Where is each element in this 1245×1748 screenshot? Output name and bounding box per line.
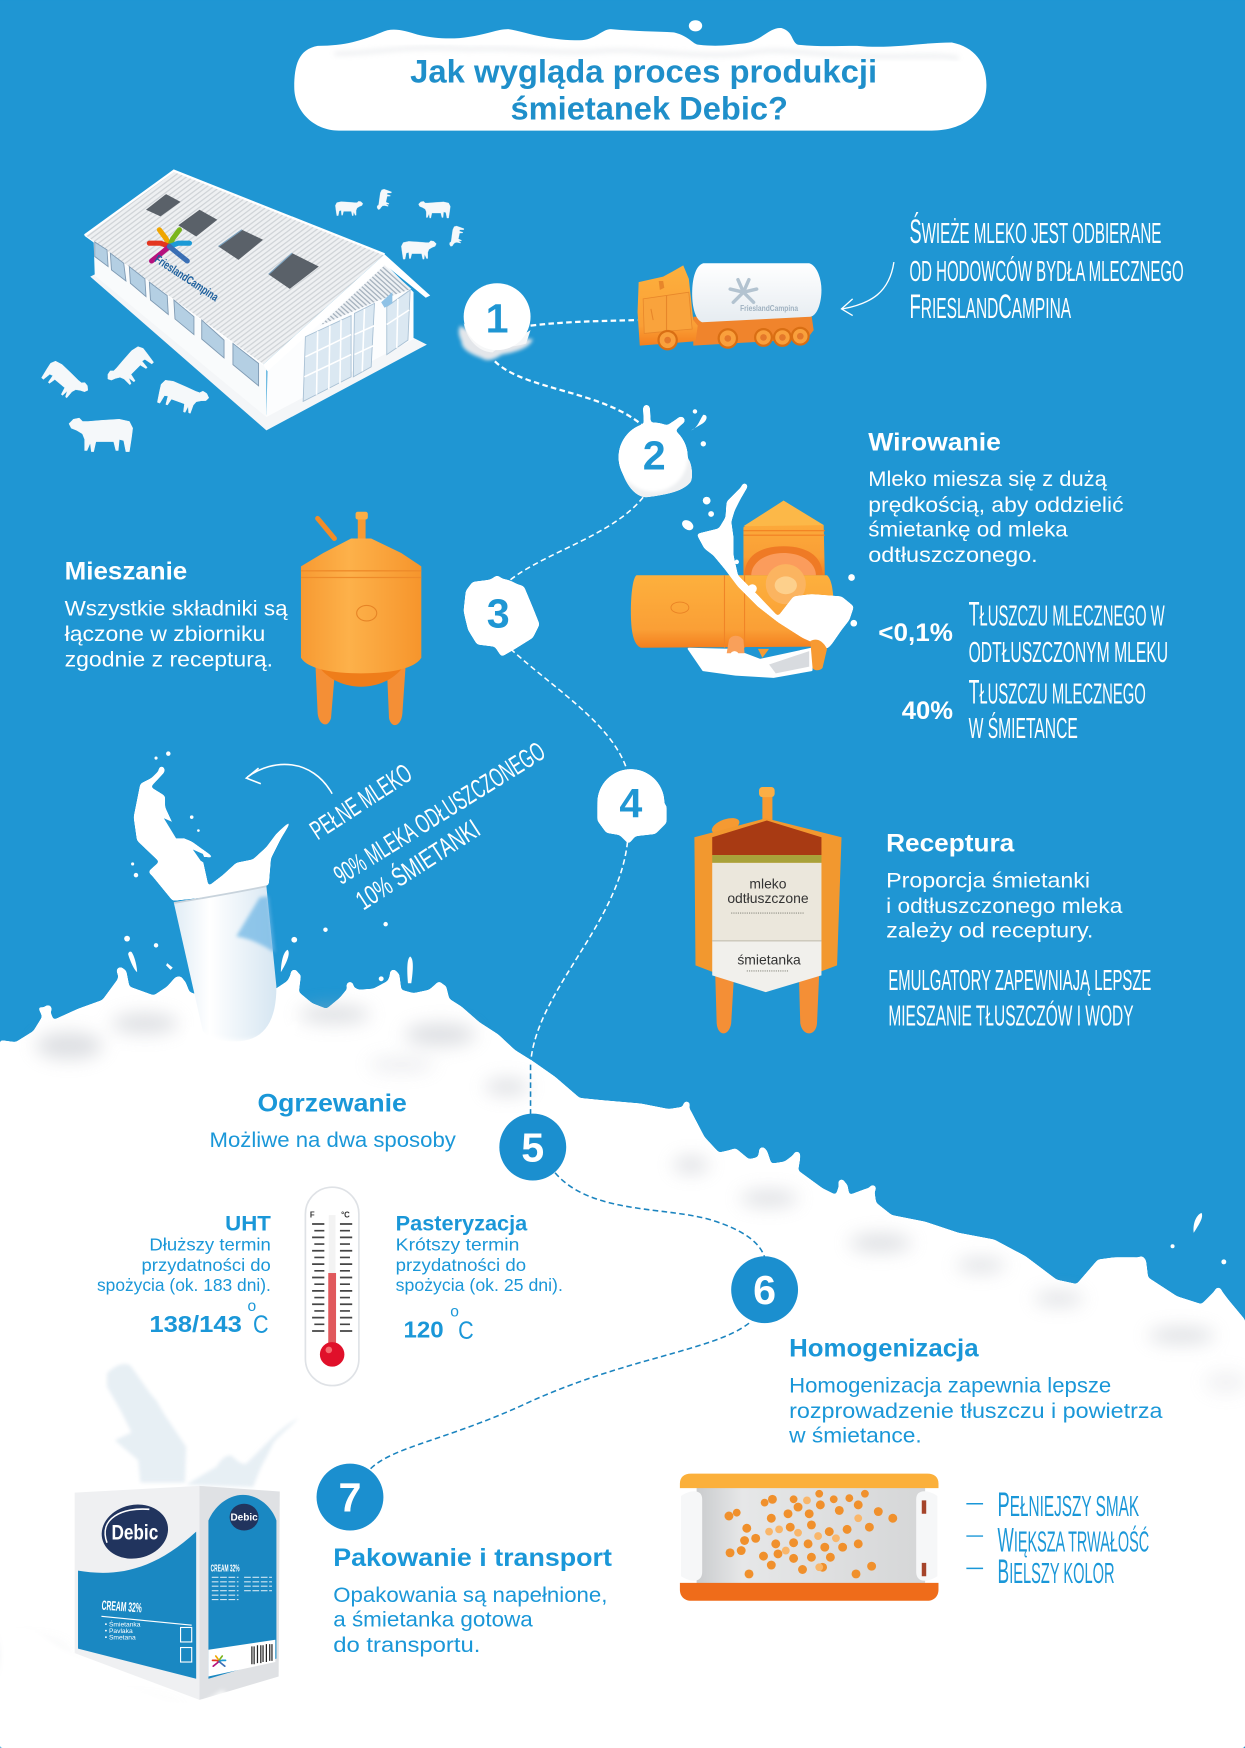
base platform bbox=[90, 274, 427, 430]
step 6 badge bbox=[731, 1256, 798, 1323]
Receptura text: Proporcja śmietanki bbox=[886, 869, 1090, 892]
Debic product box: CREAM 32% bbox=[101, 1598, 142, 1615]
truck cab bbox=[638, 265, 698, 346]
Wirowanie text: prędkością, aby oddzielić bbox=[868, 494, 1124, 517]
Homogenizacja text: Homogenizacja zapewnia lepsze bbox=[789, 1374, 1111, 1397]
step 3 badge bbox=[464, 575, 539, 657]
gable edge bbox=[263, 254, 430, 371]
step 2 badge bbox=[619, 405, 710, 504]
gable wall bbox=[266, 263, 414, 417]
fat stats: 40% bbox=[902, 698, 953, 725]
UHT column: 138/143 bbox=[149, 1311, 242, 1337]
centrifuge illustration bbox=[631, 483, 857, 677]
step 7 badge bbox=[317, 1464, 383, 1530]
droplets bbox=[124, 922, 1226, 1264]
truck illustration: FrieslandCampina bbox=[740, 304, 799, 313]
step 3 badge: 3 bbox=[487, 591, 510, 637]
thermometer bbox=[305, 1187, 359, 1386]
UHT column: przydatności do bbox=[142, 1255, 271, 1275]
Wirowanie text: Mleko miesza się z dużą bbox=[868, 468, 1107, 491]
horizontal cylinder bbox=[631, 575, 834, 648]
text: fresh milk: FRIESLANDCAMPINA bbox=[910, 288, 1071, 326]
chassis bbox=[693, 314, 814, 346]
Mieszanie text: łączone w zbiorniku bbox=[65, 623, 265, 646]
Wirowanie text: odtłuszczonego. bbox=[868, 544, 1038, 567]
Pakowanie text bbox=[333, 1545, 612, 1657]
step 1 badge: 1 bbox=[486, 295, 509, 341]
legs bbox=[727, 636, 745, 653]
Debic product box: • Pavlaka bbox=[105, 1628, 133, 1635]
Homogenizacja text: Homogenizacja bbox=[789, 1336, 979, 1363]
benefits list: BIELSZY KOLOR bbox=[998, 1553, 1115, 1591]
skylights bbox=[146, 194, 319, 289]
Homogenizacja text: rozprowadzenie tłuszczu i powietrza bbox=[789, 1400, 1163, 1423]
glass entrance bbox=[303, 290, 410, 401]
thermometer: °C bbox=[341, 1210, 350, 1219]
recipe tank illustration bbox=[694, 787, 842, 1033]
milk foreground bbox=[0, 1625, 334, 1748]
recipe tank illustration: śmietanka bbox=[737, 951, 801, 967]
Pasteryzacja column: o bbox=[450, 1303, 459, 1320]
Pakowanie text: do transportu. bbox=[333, 1634, 480, 1657]
Pasteryzacja column: C bbox=[458, 1318, 474, 1345]
faded splash bbox=[107, 1364, 299, 1487]
recipe tank illustration: odtłuszczone bbox=[727, 890, 809, 906]
recipe tank illustration: mleko bbox=[749, 875, 787, 891]
Mieszanie text bbox=[65, 559, 288, 672]
Debic product box: Debic bbox=[111, 1521, 158, 1544]
glass bbox=[174, 886, 276, 1041]
Wirowanie text: śmietankę od mleka bbox=[868, 518, 1068, 541]
Pasteryzacja column: Krótszy termin bbox=[396, 1235, 519, 1255]
step 4 badge: 4 bbox=[619, 780, 642, 826]
Debic product box: Debic bbox=[230, 1512, 258, 1523]
mixing tank illustration bbox=[301, 512, 421, 725]
thermometer: F bbox=[310, 1210, 315, 1219]
Receptura text: zależy od receptury. bbox=[886, 920, 1093, 943]
Pakowanie text: Opakowania są napełnione, bbox=[333, 1584, 607, 1607]
title: śmietanek Debic? bbox=[510, 90, 788, 126]
UHT column: spożycia (ok. 183 dni). bbox=[97, 1275, 271, 1295]
title: Jak wygląda proces produkcji bbox=[410, 54, 877, 90]
Ogrzewanie text: Ogrzewanie bbox=[257, 1090, 407, 1117]
Mieszanie text: Mieszanie bbox=[65, 559, 187, 586]
Pasteryzacja column: Pasteryzacja bbox=[396, 1213, 527, 1236]
Homogenizacja text: w śmietance. bbox=[788, 1424, 922, 1447]
Ogrzewanie text bbox=[210, 1090, 456, 1152]
step 1 badge bbox=[459, 283, 533, 360]
glass of milk with splash bbox=[131, 751, 297, 1063]
logo bbox=[149, 230, 189, 261]
UHT column: C bbox=[253, 1312, 269, 1339]
UHT column bbox=[97, 1213, 271, 1339]
Pakowanie text: a śmietanka gotowa bbox=[333, 1608, 533, 1631]
Wirowanie text bbox=[868, 429, 1124, 567]
Debic product box: • Smetana bbox=[105, 1635, 136, 1642]
fat globules bbox=[724, 1490, 897, 1578]
Pakowanie text: Pakowanie i transport bbox=[333, 1545, 612, 1572]
wheels bbox=[659, 328, 809, 349]
milk shading bbox=[0, 1006, 1245, 1720]
fat stats: W ŚMIETANCE bbox=[969, 711, 1078, 745]
milk composition text: 90% MLEKA ODŁUSZCZONEGO bbox=[328, 736, 550, 890]
UHT column: o bbox=[247, 1298, 256, 1315]
fat stats: <0,1% bbox=[878, 620, 953, 647]
homogenizer cylinder bbox=[680, 1474, 938, 1601]
milk rim over glass bbox=[178, 1020, 297, 1063]
milk composition text: PEŁNE MLEKO bbox=[305, 758, 417, 846]
lower milk bbox=[689, 649, 811, 677]
UHT column: UHT bbox=[225, 1213, 271, 1236]
benefits list bbox=[966, 1486, 1149, 1591]
splash bbox=[134, 766, 293, 901]
fat stats bbox=[878, 595, 1168, 745]
milk swirl bbox=[697, 483, 854, 649]
step 5 badge: 5 bbox=[521, 1125, 544, 1171]
title milk blob bbox=[294, 28, 986, 131]
milk wave lower background bbox=[0, 922, 1245, 1748]
step 5 badge bbox=[499, 1114, 566, 1181]
Receptura text: Receptura bbox=[886, 831, 1015, 858]
Pasteryzacja column bbox=[396, 1213, 563, 1345]
step 7 badge: 7 bbox=[339, 1475, 361, 1521]
tank body bbox=[301, 539, 421, 673]
logos bbox=[97, 1498, 173, 1565]
milk composition text bbox=[305, 736, 550, 916]
barcode panel bbox=[208, 1640, 275, 1677]
UHT column: Dłuższy termin bbox=[149, 1235, 271, 1255]
Homogenizacja text bbox=[788, 1336, 1163, 1447]
icon: cows bbox=[40, 188, 464, 452]
Debic product box: CREAM 32% bbox=[211, 1564, 240, 1575]
step 6 badge: 6 bbox=[753, 1267, 776, 1313]
side wall bbox=[94, 240, 266, 417]
side windows bbox=[95, 242, 259, 386]
Pasteryzacja column: przydatności do bbox=[396, 1255, 526, 1275]
box faces bbox=[75, 1486, 200, 1700]
arrow to truck bbox=[842, 262, 894, 316]
tank legs bbox=[315, 664, 335, 724]
arrow to glass bbox=[246, 764, 332, 794]
step 2 badge: 2 bbox=[643, 432, 666, 478]
milk tank bbox=[692, 263, 821, 322]
Mieszanie text: zgodnie z recepturą. bbox=[65, 649, 273, 672]
dashed path between steps bbox=[370, 320, 765, 1469]
icon: farm building bbox=[85, 171, 430, 430]
Debic product box bbox=[0, 1364, 334, 1748]
Receptura text: i odtłuszczonego mleka bbox=[886, 895, 1123, 918]
roof bbox=[85, 171, 385, 365]
Debic product box: • Śmietanka bbox=[105, 1619, 141, 1628]
text: fresh milk bbox=[910, 211, 1184, 326]
Mieszanie text: Wszystkie składniki są bbox=[65, 597, 288, 620]
Receptura text bbox=[886, 831, 1151, 1033]
Ogrzewanie text: Możliwe na dwa sposoby bbox=[210, 1129, 456, 1152]
Pasteryzacja column: 120 bbox=[403, 1317, 444, 1343]
milk composition text: 10% ŚMIETANKI bbox=[349, 812, 485, 916]
Wirowanie text: Wirowanie bbox=[868, 429, 1001, 456]
icon: farm building: FrieslandCampina bbox=[152, 253, 221, 304]
step 4 badge bbox=[597, 769, 667, 844]
truck illustration bbox=[638, 263, 821, 349]
vertical section bbox=[743, 501, 825, 575]
title bbox=[294, 20, 986, 131]
Pasteryzacja column: spożycia (ok. 25 dni). bbox=[396, 1275, 563, 1295]
